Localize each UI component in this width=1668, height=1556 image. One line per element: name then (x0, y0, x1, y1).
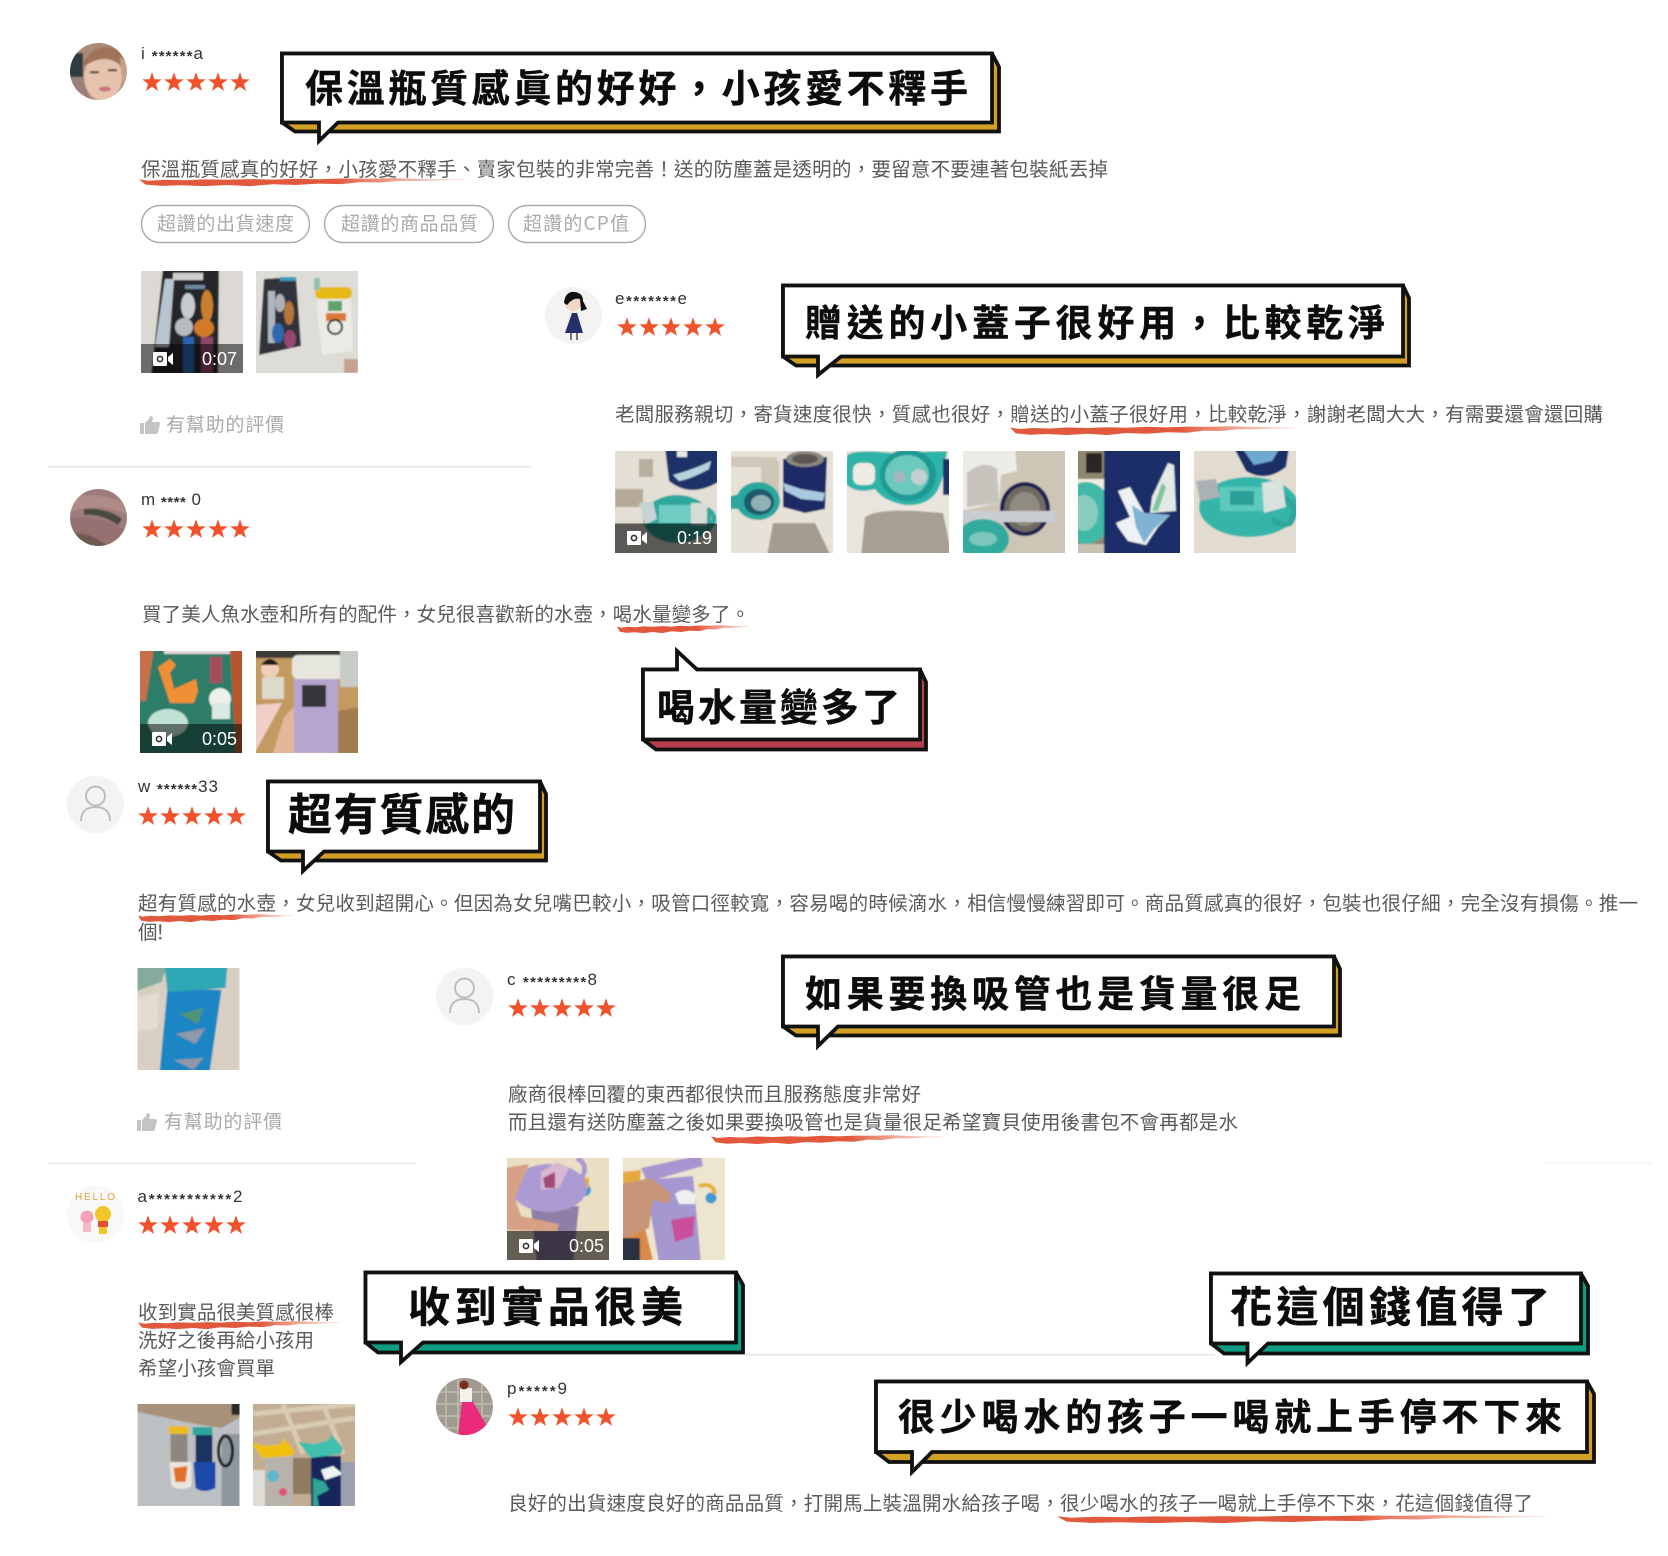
review: e*******e (545, 287, 1603, 559)
speech balloon: 花這個錢 (1211, 1274, 1588, 1363)
review text (508, 1078, 1238, 1135)
speech balloon: 如果要換 (783, 956, 1340, 1046)
username: ******* (626, 293, 676, 310)
username: 8 (588, 970, 597, 989)
speech balloon: 很少喝水: 很少喝水的孩子一喝就上手停不下來 (898, 1387, 1562, 1441)
username: a (138, 1187, 147, 1206)
review text: 買了美人魚水壺和所有的配件，女兒很喜歡新的水壺，喝水量變多了。 (142, 598, 750, 627)
username: 9 (558, 1379, 567, 1398)
username: e (615, 289, 624, 308)
username: ********* (523, 974, 586, 991)
thumbnail: child and bottle (256, 651, 358, 753)
review: p*****9 (436, 1378, 1546, 1523)
review: a***********2 (67, 1186, 358, 1509)
thumbnail: shark bottle (1078, 451, 1180, 553)
divider: left lower (48, 1162, 416, 1164)
speech balloon: 如果要換: 如果要換吸管也是貨量很足 (805, 964, 1301, 1018)
username: 0 (186, 490, 201, 509)
review text (138, 1296, 334, 1381)
video thumbnail: lavender lid: 0:05 (569, 1236, 604, 1256)
review text: 希望小孩會買單 (138, 1352, 275, 1381)
helpful button: 有幫助的評價 (164, 1107, 282, 1134)
brush underline (1057, 1515, 1546, 1523)
avatar: lavender field (70, 489, 127, 546)
thumbnail: blue shark bottle (138, 968, 240, 1070)
review text: 個！ (138, 916, 170, 945)
speech balloon: 超有質感: 超有質感的 (288, 779, 515, 843)
username: **** (161, 494, 186, 511)
thumbnail: pack and bottle (256, 271, 358, 373)
tag pills (142, 206, 646, 242)
avatar: woman in pink hanbok (436, 1378, 493, 1435)
video thumbnail: accessory pack (141, 271, 243, 373)
username: p (507, 1379, 516, 1398)
username: c (507, 970, 516, 989)
username: *********** (149, 1191, 231, 1208)
username: w (138, 777, 150, 796)
thumbnail: bottle opening (963, 451, 1065, 553)
thumbnail: items on plastic (138, 1404, 240, 1506)
review text: 而且還有送防塵蓋之後如果要換吸管也是貨量很足希望寶貝使用後書包不會再都是水 (508, 1106, 1238, 1135)
thumbnail: two bottles (253, 1404, 355, 1506)
tag pills: 超讚的出貨速度 (157, 209, 294, 236)
star rating (142, 72, 250, 91)
speech balloon: 保溫瓶: 保溫瓶質感眞的好好，小孩愛不釋手 (305, 58, 968, 113)
speech balloon: 超有質感 (268, 779, 546, 871)
thumbnail: lid close-up (847, 451, 949, 553)
avatar: default person (67, 776, 124, 833)
star rating (508, 1407, 616, 1426)
review text: 廠商很棒回覆的東西都很快而且服務態度非常好 (508, 1078, 921, 1107)
review: m****0 (67, 486, 750, 756)
review text: 保溫瓶質感真的好好，小孩愛不釋手、賣家包裝的非常完善！送的防塵蓋是透明的，要留意不要連著包裝紙丟掉 (141, 153, 1108, 182)
avatar: default person (436, 968, 493, 1025)
video thumbnail: accessory pack: 0:07 (202, 349, 237, 369)
review text: 收到實品很美質感很棒 (138, 1296, 334, 1325)
speech balloon: 花這個錢: 花這個錢值得了 (1230, 1274, 1550, 1335)
brush underline (711, 1135, 942, 1144)
username: 2 (233, 1187, 242, 1206)
star rating (508, 998, 616, 1017)
username: m (141, 490, 155, 509)
star rating (138, 1215, 246, 1234)
video thumbnail: printed fabric: 0:05 (202, 729, 237, 749)
tag pills: 超讚的商品品質 (341, 209, 478, 236)
star rating (142, 519, 250, 538)
speech balloon: 收到實品: 收到實品很美 (408, 1274, 683, 1335)
review text: 老闆服務親切，寄貨速度很快，質感也很好，贈送的小蓋子很好用，比較乾淨，謝謝老闆大大，有需要還會還回購 (615, 398, 1603, 427)
review: c*********8 (436, 968, 1238, 1263)
thumbnail: unicorn bottle (623, 1158, 725, 1260)
review text: 超有質感的水壺，女兒收到超開心。但因為女兒嘴巴較小，吸管口徑較寬，容易喝的時候滴水，相信慢慢練習即可。商品質感真的很好，包裝也很仔細，完全沒有損傷。推一 (138, 887, 1638, 916)
review: i******a (67, 40, 1108, 437)
avatar: girl in dress (545, 287, 602, 344)
divider: far right (1545, 1162, 1652, 1164)
brush underline (138, 914, 293, 922)
review text: 良好的出貨速度良好的商品品質，打開馬上裝溫開水給孩子喝，很少喝水的孩子一喝就上手停不下來，花這個錢值得了 (508, 1487, 1533, 1516)
thumbnail: teal lid (1194, 451, 1296, 553)
username: ***** (518, 1383, 556, 1400)
video thumbnail: printed fabric (140, 651, 242, 753)
star rating (617, 317, 725, 336)
video thumbnail: teal lid and bottle (615, 451, 717, 553)
speech balloon: 喝水量: 喝水量變多了 (657, 677, 900, 732)
username: ****** (157, 781, 197, 798)
avatar: woman portrait (70, 43, 127, 100)
review: w******33 (67, 776, 1638, 1134)
review text (138, 887, 1638, 945)
avatar: hello bear and pig: HELLO (75, 1192, 115, 1203)
username: e (678, 289, 687, 308)
speech balloon: 喝水量 (643, 651, 926, 750)
brush underline (617, 625, 750, 633)
speech balloon: 收到實品 (366, 1272, 743, 1362)
tag pills: 超讚的CP值 (523, 209, 629, 236)
username: ****** (152, 48, 193, 65)
username: i (141, 44, 145, 63)
helpful button: 有幫助的評價 (166, 410, 284, 437)
speech balloon: 保溫瓶 (282, 54, 999, 141)
review text: 洗好之後再給小孩用 (138, 1324, 314, 1353)
divider: lower right (745, 1354, 1215, 1356)
thumbnail: navy bottle and ring (731, 451, 833, 553)
brush underline (1010, 426, 1295, 435)
speech balloon: 贈送 (783, 286, 1409, 375)
avatar: hello bear and pig (67, 1186, 124, 1243)
video thumbnail: lavender lid (507, 1158, 609, 1260)
speech balloon: 贈送: 贈送的小蓋子很好用，比較乾淨 (805, 293, 1385, 347)
username: a (194, 44, 204, 63)
brush underline (139, 178, 465, 186)
brush underline (138, 1321, 340, 1329)
divider: after review 1 (48, 466, 532, 468)
username: 33 (198, 777, 218, 796)
video thumbnail: teal lid and bottle: 0:19 (677, 528, 712, 548)
speech balloon: 很少喝水 (876, 1382, 1594, 1472)
star rating (138, 806, 246, 825)
